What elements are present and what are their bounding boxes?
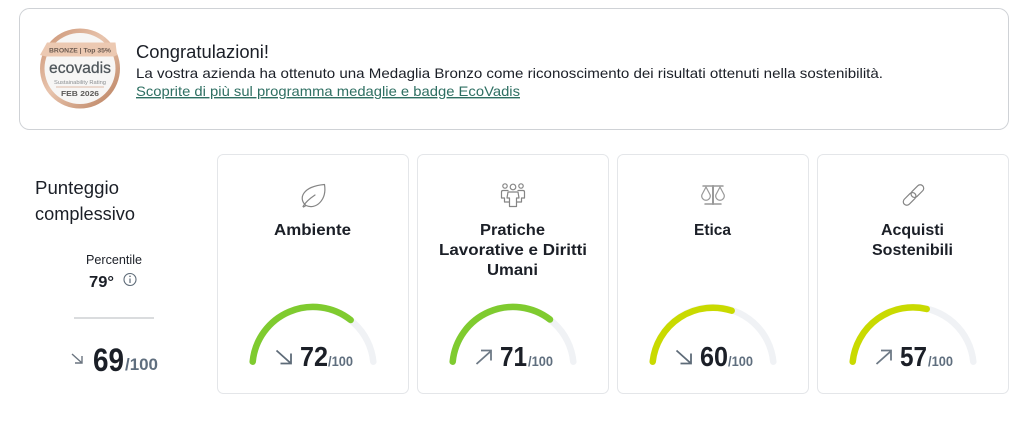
title: Ambiente: Ambiente bbox=[274, 222, 351, 239]
score: 71 bbox=[500, 341, 553, 372]
percentile value: 79° bbox=[89, 274, 114, 291]
score: 57: 57 bbox=[900, 341, 927, 372]
panel: Acquisti Sostenibili bbox=[818, 154, 1008, 394]
overall score value bbox=[93, 342, 158, 378]
overall score value: /100 bbox=[125, 356, 158, 374]
link: medals programme: Scoprite di più sul programma medaglie e badge EcoVadis bbox=[136, 83, 520, 99]
score: 71: /100 bbox=[528, 353, 553, 369]
text: medal description: La vostra azienda ha ottenuto una Medaglia Bronzo come riconoscimento dei risultati ottenuti nella sostenibilità. bbox=[136, 65, 883, 81]
icon: scales bbox=[702, 186, 724, 204]
icon: bronze medal badge: FEB 2026 bbox=[61, 89, 99, 98]
heading: overall score: Punteggio bbox=[35, 178, 119, 198]
score: 57 bbox=[900, 341, 953, 372]
title: Etica: Etica bbox=[694, 222, 731, 239]
icon: bronze medal badge: Sustainability Rating bbox=[54, 80, 106, 86]
icon: people bbox=[502, 184, 524, 206]
score: 72: /100 bbox=[328, 353, 353, 369]
icon: bronze medal badge: BRONZE | Top 35% bbox=[49, 48, 112, 54]
score: 57: /100 bbox=[928, 353, 953, 369]
score: 72 bbox=[300, 341, 353, 372]
percentile label: Percentile bbox=[86, 253, 142, 267]
arrow: trend down bbox=[276, 350, 291, 364]
icon: info bbox=[124, 274, 136, 286]
panel: Pratiche Lavorative e Diritti Umani bbox=[418, 154, 608, 394]
title: Pratiche Lavorative e Diritti Umani: Lavorative e Diritti bbox=[439, 242, 587, 259]
heading: overall score: complessivo bbox=[35, 204, 135, 224]
icon: chain link bbox=[902, 183, 925, 207]
score: 72: 72 bbox=[300, 341, 328, 372]
gauge: Etica 60 bbox=[653, 307, 773, 372]
panel: overall score bbox=[35, 178, 158, 378]
arrow: trend down bbox=[676, 350, 691, 364]
gauge: Ambiente 72 bbox=[253, 307, 373, 372]
icon: bronze medal badge bbox=[40, 28, 120, 108]
arrow: trend up bbox=[476, 350, 491, 364]
arrow: overall trend down bbox=[72, 354, 82, 363]
overall score value: 69 bbox=[93, 342, 124, 378]
icon: bronze medal badge: ecovadis bbox=[49, 60, 111, 77]
panel: congratulations banner bbox=[20, 8, 1008, 130]
panel: Etica bbox=[618, 154, 808, 394]
title: Acquisti Sostenibili: Acquisti bbox=[881, 222, 944, 239]
title: Acquisti Sostenibili: Sostenibili bbox=[872, 242, 953, 259]
score: 60: /100 bbox=[728, 353, 753, 369]
title: Acquisti Sostenibili bbox=[872, 222, 953, 259]
arrow: trend up bbox=[876, 350, 891, 364]
score: 60: 60 bbox=[700, 341, 728, 372]
score: 71: 71 bbox=[500, 341, 527, 372]
heading: overall score bbox=[35, 178, 135, 224]
score: 60 bbox=[700, 341, 753, 372]
gauge: Acquisti 57 bbox=[853, 307, 973, 372]
title: Pratiche Lavorative e Diritti Umani: Pratiche bbox=[480, 222, 545, 239]
title: Pratiche Lavorative e Diritti Umani bbox=[439, 222, 587, 279]
heading: congratulations: Congratulazioni! bbox=[136, 42, 269, 62]
title: Pratiche Lavorative e Diritti Umani: Umani bbox=[487, 262, 538, 279]
gauge: Pratiche 71 bbox=[453, 307, 573, 372]
panel: Ambiente bbox=[218, 154, 408, 394]
icon: leaf bbox=[302, 184, 325, 207]
